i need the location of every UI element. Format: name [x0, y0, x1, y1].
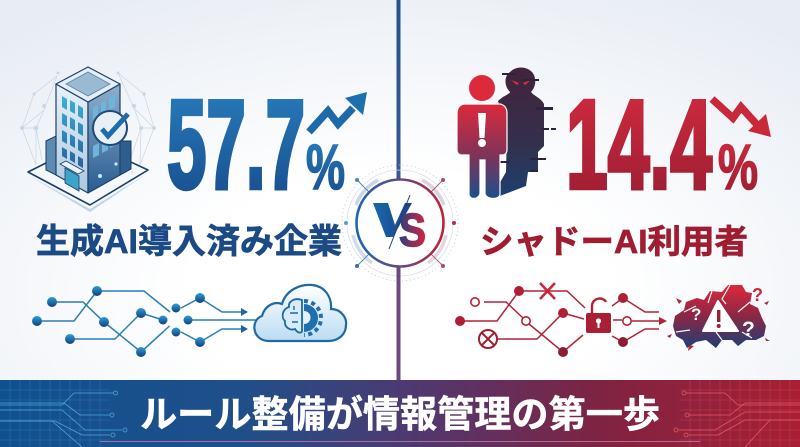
vs badge	[342, 165, 458, 381]
tower faces	[56, 84, 88, 193]
vs letters: S	[399, 204, 426, 256]
network flow diagram: red broken	[455, 283, 667, 357]
icon: shattered cloud with warning triangle: ?	[752, 285, 763, 305]
icon: open padlock	[586, 299, 611, 333]
entrance	[65, 168, 79, 191]
bottom divider stub	[396, 268, 400, 381]
big number: 57.7%: 57.7	[167, 74, 305, 215]
icon: falling arrow	[712, 99, 771, 137]
network halo behind building	[20, 72, 156, 165]
icon: rising arrow	[309, 92, 367, 132]
circuit grid right	[680, 380, 800, 447]
icon: shattered cloud with warning triangle: ?	[742, 318, 755, 341]
outer decorative rings	[342, 165, 458, 281]
label: shadow AI users: シャドーAI利用者	[480, 223, 748, 260]
circuit grid left	[0, 380, 110, 447]
spokes and nodes	[357, 180, 443, 266]
icon: office building with check badge	[20, 67, 156, 212]
icon: cloud with brain and gear	[254, 285, 346, 341]
glow line	[100, 440, 700, 442]
base platform	[28, 142, 148, 205]
foreground person	[457, 75, 507, 198]
big number: 14.4%: %	[718, 131, 758, 203]
big number: 57.7%: %	[306, 131, 345, 203]
bottom banner	[0, 380, 800, 447]
banner text: ルール整備が情報管理の第一歩	[140, 394, 660, 435]
network flow diagram: blue	[32, 286, 256, 357]
ring	[356, 180, 444, 266]
crossed node	[479, 330, 497, 348]
shadow figure	[497, 68, 556, 197]
icon: shattered cloud with warning triangle: ?	[691, 305, 701, 324]
glow dots	[98, 162, 133, 178]
center divider	[396, 0, 400, 381]
label: adopted companies: 生成AI導入済み企業	[36, 223, 342, 261]
check badge	[93, 111, 128, 145]
icon: person with glitching shadow figure	[457, 68, 556, 198]
x mark	[540, 283, 555, 299]
low wings	[46, 136, 56, 175]
vs letters	[373, 195, 426, 256]
windows	[62, 96, 83, 168]
icon: shattered cloud with warning triangle	[667, 285, 770, 351]
